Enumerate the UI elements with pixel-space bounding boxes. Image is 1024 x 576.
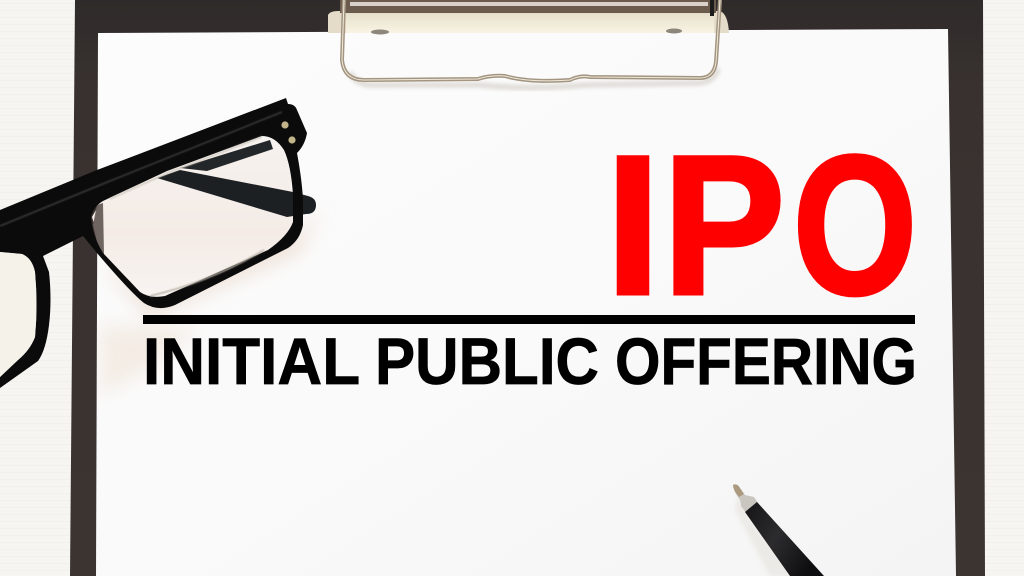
subtitle: initial public offering: OFFERING: [615, 324, 917, 398]
pen metal tip: [733, 484, 758, 513]
left lens tint: [0, 252, 36, 377]
glasses shadow: [96, 221, 314, 391]
pen: [733, 484, 824, 576]
subtitle: initial public offering: PUBLIC: [375, 324, 599, 398]
clip top bar: [340, 0, 716, 16]
metal clip: [328, 0, 729, 88]
divider rule: [143, 315, 915, 324]
pen body: [745, 502, 824, 576]
lens top reflection: [110, 137, 262, 199]
clip wire highlight: [342, 0, 720, 81]
back temple arm, upper: [180, 140, 273, 171]
clipboard paper sheet: [96, 29, 956, 576]
glasses frame: [0, 98, 307, 388]
right lens tint: [92, 137, 293, 298]
clip wire shadow: [350, 68, 718, 88]
title: IPO: P: [663, 114, 785, 336]
eyeglasses: [0, 98, 316, 388]
clip pivot right: [666, 28, 682, 34]
pen shadow: [735, 492, 795, 576]
lens rim reflection: [150, 250, 264, 296]
clip wire loop: [342, 0, 720, 81]
clip plate highlight: [346, 14, 714, 33]
hinge rivet lower: [288, 136, 296, 144]
clip pivot left: [371, 30, 389, 34]
front temple arm: [157, 170, 316, 217]
clip base plate: [328, 11, 729, 33]
hinge rivet upper: [281, 121, 289, 129]
frame top highlight: [0, 112, 282, 226]
title: IPO: I: [606, 114, 661, 336]
title: IPO: O: [793, 114, 917, 336]
subtitle: initial public offering: INITIAL: [143, 324, 359, 398]
board seen through lens: [93, 203, 104, 255]
pen tip point: [733, 484, 744, 497]
